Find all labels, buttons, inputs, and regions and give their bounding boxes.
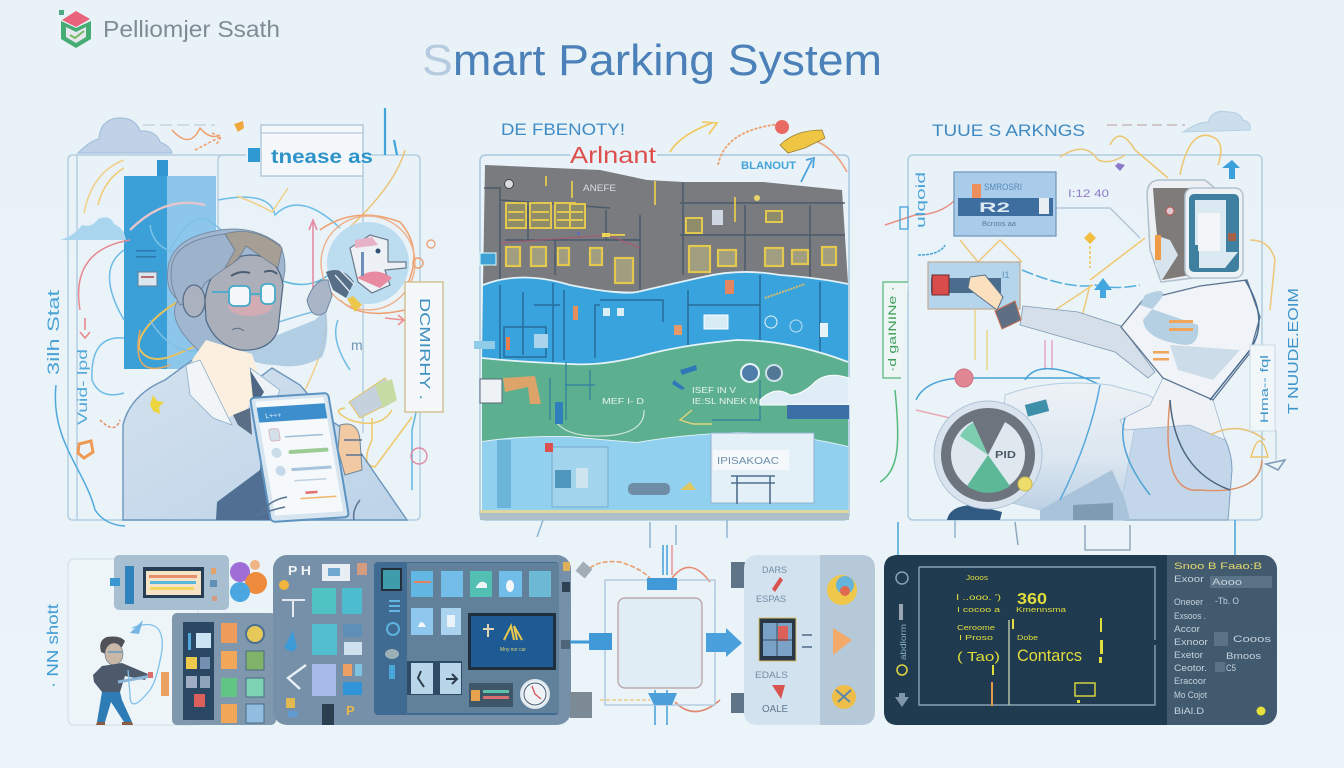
vertical label: 3ilh Stat: 3ilh Stat: [44, 290, 63, 375]
icon: colour circle: [827, 575, 857, 605]
console right: settings list: -Tb. O: [1215, 596, 1239, 606]
vertical green box: [883, 282, 908, 378]
console text: yellow readouts: Dobe: [1017, 635, 1038, 642]
engine base dark: [947, 505, 1002, 520]
side wires: [590, 545, 720, 725]
sidebar icons: [382, 569, 401, 679]
console right: settings list: Exetor: [1174, 650, 1203, 660]
icon: colour splash: [230, 560, 267, 602]
title: Smart Parking System: [422, 36, 882, 85]
arrows and diamonds: [1084, 160, 1240, 298]
vertical label left small: ulqoid: [913, 172, 928, 228]
logo: [59, 10, 280, 48]
card: status top: [954, 172, 1056, 236]
icon: round pin: [411, 448, 427, 464]
step labels: DARS: [762, 565, 787, 575]
collar: [186, 360, 232, 425]
left column icons: [279, 563, 367, 725]
connector top: [647, 578, 677, 590]
console text: yellow readouts: Ceroome: [957, 625, 995, 632]
device icon: [759, 618, 796, 661]
heading: DE FBENOTY: DE FBENOTY!: [501, 120, 625, 139]
console right: settings list: BiAl.D: [1174, 706, 1205, 716]
console text: yellow readouts: Kmennsma: [1016, 607, 1066, 614]
icon: flashlight: [326, 270, 362, 312]
layer: green zone: ISEF IN V: [692, 386, 737, 395]
console side icons: [895, 572, 909, 707]
label: m: m: [351, 337, 363, 353]
panel: dark status console: [884, 555, 1277, 725]
card: status top: R2: [979, 199, 1010, 215]
icon: blue cloud: [60, 217, 126, 240]
arrow right: [706, 628, 742, 657]
icon: orange cone: [833, 628, 852, 655]
icon: yellow gear: [832, 685, 856, 709]
top hair: [225, 231, 282, 268]
tile rows: [407, 571, 551, 695]
chart: pie on engine: [934, 399, 1049, 509]
layer: grey building: [480, 165, 848, 292]
tablet: [250, 393, 349, 522]
mini chart: [469, 683, 513, 707]
panel frame: [68, 125, 420, 520]
right hand: [338, 424, 362, 475]
console text: yellow readouts: I cocoo a: [957, 607, 1000, 614]
legs: [97, 692, 132, 722]
parking kiosk: [480, 379, 502, 403]
torso: [93, 663, 148, 692]
console right: settings list: Accor: [1174, 624, 1200, 634]
card: status top: SMROSRI: [984, 182, 1022, 192]
connector lines: [880, 125, 1275, 482]
arrows: [80, 108, 404, 338]
icon: red junction: [955, 369, 973, 387]
layer: grey building: ANEFE: [583, 183, 616, 193]
heading: Arlnant: Arlnant: [570, 142, 657, 168]
step label two: ESPAS: [756, 594, 786, 604]
chart frame: [919, 567, 1155, 705]
console right: settings list: Exsoos .: [1174, 611, 1206, 621]
person: man with tool: [93, 620, 169, 725]
panel: left person with tablet: [44, 108, 443, 526]
device: monitor card: [110, 555, 229, 610]
panel frame: [480, 155, 849, 520]
person: woman with glasses: [123, 229, 407, 522]
console right: settings list: Mo Cojot: [1174, 690, 1207, 700]
console right: settings list: C5: [1226, 663, 1236, 673]
panel frame: [68, 559, 198, 725]
screen: blue display: [468, 613, 556, 670]
vest: [216, 430, 282, 520]
console text: yellow readouts: Contarcs: [1017, 646, 1082, 665]
icon: logo cube: [59, 10, 91, 48]
icon: yellow horn: [780, 130, 825, 153]
console text: yellow readouts: Jooos: [966, 575, 989, 582]
hand: [968, 275, 1003, 310]
panel: process steps: [744, 555, 875, 725]
cuff: [995, 301, 1021, 329]
fingers: [256, 440, 363, 520]
person: astronaut: [947, 180, 1276, 520]
console right: settings list: Snoo B Faao:B: [1174, 561, 1262, 571]
chart: pie on engine: PID: [995, 450, 1016, 461]
side blocks: [570, 562, 745, 718]
console text: yellow readouts: I Proso: [959, 635, 993, 642]
blue tower: [124, 160, 216, 369]
label: BLANOUT: BLANOUT: [741, 160, 796, 172]
console right: settings list: Bmoos: [1226, 651, 1262, 661]
logo wordmark: Pelliomjer Ssath: [103, 16, 280, 42]
ear: [183, 285, 205, 317]
card: status top: Bcroos aa: [982, 221, 1016, 228]
icon: red badge: [775, 120, 789, 134]
console text: yellow readouts: 360: [1017, 591, 1047, 608]
console right: settings list: Ceotor.: [1174, 663, 1207, 673]
layer: green zone: MEF I- D: [602, 397, 644, 406]
engine body: [1000, 383, 1156, 510]
step one mark: [772, 577, 783, 592]
callout: vertical label box: [1250, 345, 1275, 431]
console text: yellow readouts: ( Tao): [957, 649, 1000, 664]
layer: green zone: IE:SL NNEK M: [692, 397, 758, 406]
torso: [1121, 280, 1260, 400]
icon: bird badge: [321, 216, 435, 310]
vertical label: nuude eoim: T NUUDE.EOIM: [1285, 288, 1302, 414]
translucent hair wave: [205, 310, 327, 366]
yellow windows row two: [506, 246, 836, 283]
step three mark: [772, 685, 785, 699]
blush: [228, 296, 272, 316]
orange chest marks: [1153, 320, 1193, 360]
icon: orange pin: [78, 441, 93, 458]
vertical box: DCMIRHY: DCMIRHY .: [416, 298, 433, 400]
arm: [1020, 306, 1155, 378]
panel: centre parking map: [474, 120, 849, 520]
console right: settings list: Exnoor: [1174, 637, 1208, 647]
hand holding light: [307, 280, 332, 315]
shoes: [96, 722, 133, 725]
console side icons: abdlorm: [899, 624, 908, 660]
layer: blue zone: [474, 272, 848, 365]
tool: [118, 675, 153, 682]
console right: settings list: Cooos: [1233, 634, 1272, 644]
icon: grey cloud: [78, 118, 172, 153]
tablet: L+++: [265, 412, 282, 420]
icon: orange tag: [234, 121, 244, 132]
diagram: central connector hub: [570, 545, 745, 725]
yellow windows row one: [506, 203, 782, 233]
toolbar text: P H: [288, 563, 311, 578]
inner dashboard: [374, 562, 559, 715]
panel: phone screen grid: [172, 613, 276, 725]
vertical label: Vuid-lpd: Vuid- lpd: [74, 349, 90, 425]
helmet: [1147, 180, 1243, 282]
panel: main dashboard: [273, 555, 571, 725]
card: control slot: I1: [1002, 270, 1010, 280]
engine lower shade: [1040, 470, 1130, 520]
upper decorative arrows: [670, 122, 847, 182]
step label three: EDALS: [755, 670, 788, 680]
parking building sign: IPISAKOAC: [717, 456, 779, 467]
icon: clock: [521, 680, 549, 708]
glasses: [212, 284, 275, 306]
console right: settings list: Oneoer: [1174, 597, 1203, 607]
face: [205, 255, 283, 350]
head: [105, 643, 123, 665]
console text: yellow readouts: [956, 575, 1103, 706]
vertical green box: ·d gaININe ·: [887, 286, 899, 372]
side hair: [171, 234, 240, 305]
suit wires: [1060, 280, 1276, 500]
panel: right astronaut technician: [880, 111, 1302, 520]
console right: settings list: [1174, 561, 1272, 716]
parking building sign: [711, 433, 814, 504]
connector centre square: [618, 598, 702, 688]
icon: cloud: [1183, 111, 1250, 132]
dash icons: [802, 635, 812, 647]
step label four: OALE: [762, 704, 788, 715]
callout: vertical label box: Hma-- fql: [1259, 355, 1271, 423]
small blue tag: [900, 207, 908, 229]
heading: TUUE S ARKNGS: TUUE S ARKNGS: [932, 121, 1085, 140]
jacket: [123, 358, 407, 520]
vertical box: DCMIRHY: [405, 282, 443, 412]
console text: yellow readouts: I ..ooo. '): [956, 593, 1001, 602]
console right: settings list: Aooo: [1212, 577, 1242, 587]
screen: blue display: Mny nor car: [500, 647, 526, 653]
icon: hanging bell and bow: [1251, 441, 1285, 470]
console right: settings list: Exoor: [1174, 574, 1204, 584]
console right: settings list: Eracoor: [1174, 676, 1206, 686]
callout: tnease as: tnease as: [271, 147, 373, 168]
label: 1:12 40: I:12 40: [1068, 188, 1109, 200]
hair: [100, 636, 125, 655]
hair back: [167, 229, 285, 352]
left column icons: P: [346, 703, 355, 718]
lower suit: [1122, 405, 1232, 520]
connector bottom: [648, 693, 677, 705]
panel frame: [908, 155, 1262, 520]
icon: star badge: [150, 395, 164, 414]
layer: green zone: [480, 340, 849, 447]
layer: light blue street: [480, 433, 849, 520]
curved connector lines: [55, 128, 420, 526]
connectors between rows: [537, 520, 1235, 555]
vertical label: NN shott: · NN shott: [45, 603, 62, 688]
neck: [192, 340, 262, 420]
connector left: [570, 633, 612, 650]
panel: bottom app screens: [45, 555, 571, 725]
icon: green cup: [349, 378, 397, 418]
waist connection: [1120, 378, 1225, 440]
card: control slot: [928, 262, 1020, 309]
callout: tnease as: [248, 125, 373, 176]
